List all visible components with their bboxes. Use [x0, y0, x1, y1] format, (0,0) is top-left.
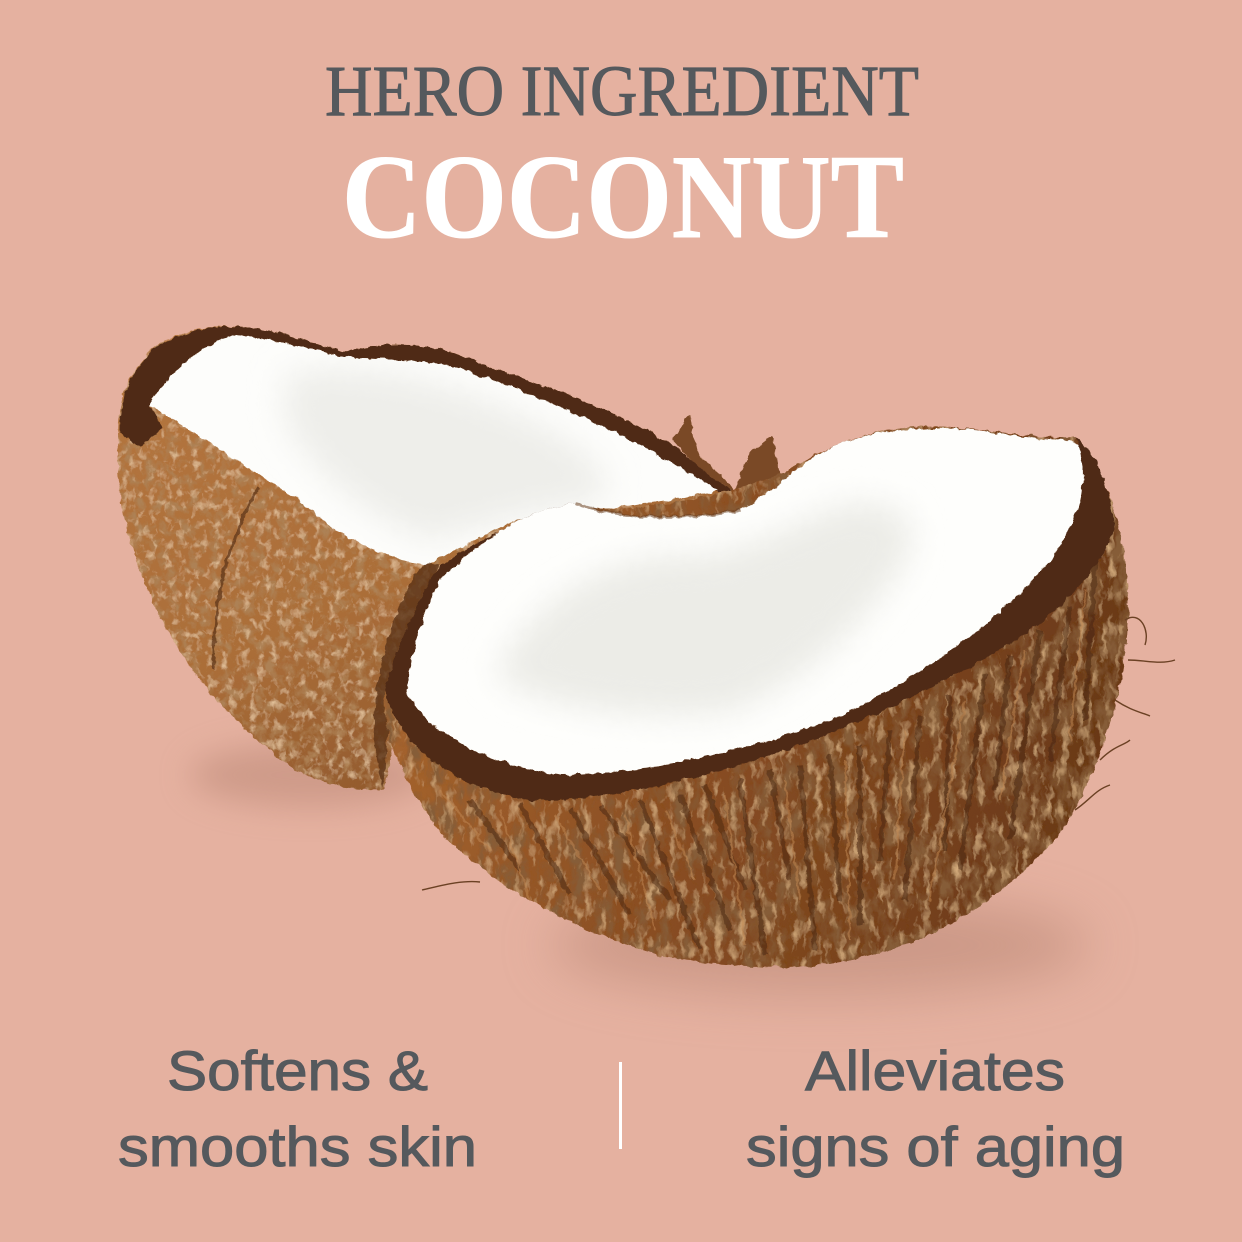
ground shadows — [190, 743, 1090, 995]
left coconut half — [118, 325, 745, 790]
left shell shadow beside right half — [374, 562, 440, 788]
husk tufts — [672, 415, 782, 498]
left crack line — [214, 488, 258, 670]
left shell dark rim — [120, 326, 745, 497]
left flesh — [149, 335, 718, 566]
flesh top rim line — [575, 503, 740, 517]
benefit: softens and smooths skin — [118, 1039, 477, 1178]
right shell dark rim — [385, 437, 1114, 800]
heading: coconut: COCONUT — [342, 130, 904, 263]
right shell streaks — [440, 560, 1095, 955]
benefit: softens and smooths skin: smooths skin — [118, 1115, 477, 1178]
right coconut half — [384, 420, 1128, 967]
heading: hero ingredient: HERO INGREDIENT — [325, 51, 919, 131]
illustration: coconut halves — [118, 325, 1175, 995]
stray husk fibres — [422, 617, 1175, 890]
benefit: alleviates signs of aging: signs of aging — [746, 1115, 1125, 1178]
right flesh — [400, 420, 1090, 780]
title — [325, 51, 919, 263]
divider — [619, 1062, 622, 1149]
benefit: alleviates signs of aging — [746, 1039, 1125, 1178]
right shell — [384, 426, 1128, 967]
benefit: softens and smooths skin: Softens & — [167, 1039, 428, 1102]
benefit: alleviates signs of aging: Alleviates — [805, 1039, 1065, 1102]
left shell — [118, 326, 745, 790]
